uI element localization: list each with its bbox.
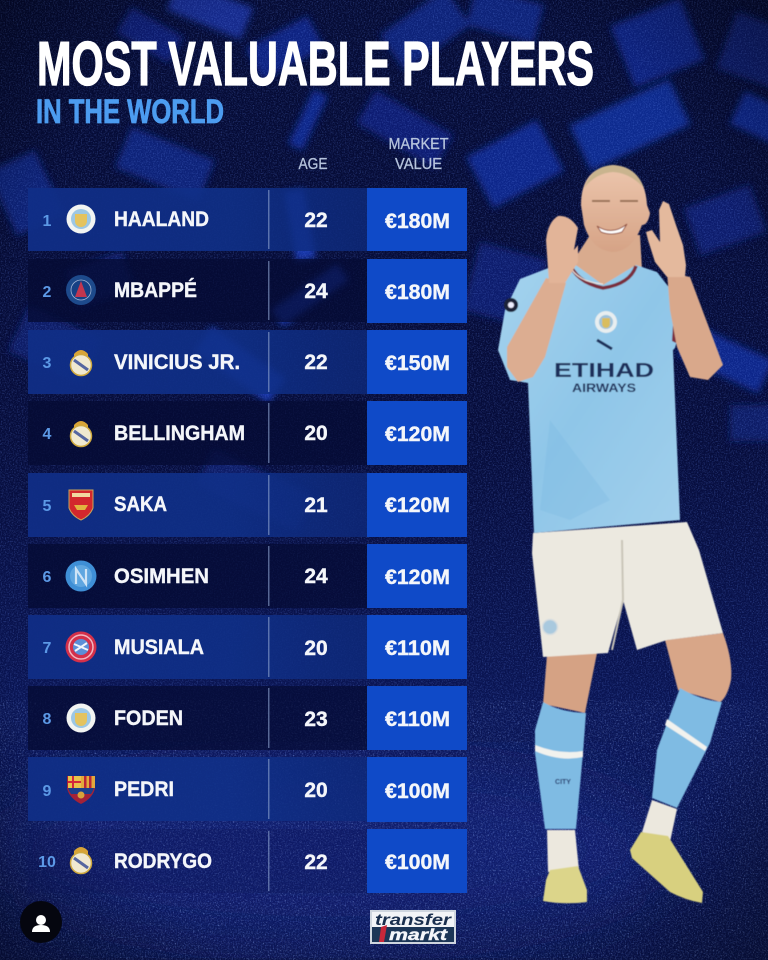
row 1: Haaland: €180M bbox=[385, 210, 450, 233]
club crest bbox=[595, 311, 617, 333]
column header: market value: MARKET bbox=[388, 136, 449, 153]
row 2: Mbappé: €180M bbox=[385, 281, 450, 304]
transfermarkt logo: markt bbox=[389, 927, 448, 944]
shorts bbox=[532, 522, 723, 657]
row 6: Osimhen: OSIMHEN bbox=[114, 565, 209, 588]
profile avatar bbox=[20, 901, 62, 943]
column header: age: AGE bbox=[298, 156, 328, 173]
left sock bbox=[535, 702, 586, 829]
row 4: Bellingham: BELLINGHAM bbox=[114, 422, 245, 445]
row 3: Vinicius Jr.: 3 bbox=[43, 355, 52, 372]
right sock bbox=[652, 688, 722, 808]
left leg and knee bbox=[543, 653, 597, 713]
row 9: Pedri: 9 bbox=[43, 783, 52, 800]
row 2: Mbappé: 2 bbox=[43, 284, 52, 301]
jersey bbox=[498, 260, 681, 533]
row 10: Rodrygo: RODRYGO bbox=[114, 850, 212, 873]
badge: Real Madrid bbox=[70, 421, 92, 446]
row 10: Rodrygo bbox=[28, 829, 467, 893]
row 8: Foden: 8 bbox=[43, 711, 52, 728]
row 5: Saka bbox=[28, 473, 467, 537]
transfermarkt logo bbox=[370, 910, 456, 944]
row 7: Musiala: €110M bbox=[385, 637, 450, 660]
left boot bbox=[543, 866, 587, 903]
right hand bbox=[646, 201, 686, 277]
badge: Real Madrid bbox=[70, 350, 92, 376]
row 3: Vinicius Jr. bbox=[28, 330, 467, 394]
neck bbox=[570, 235, 642, 292]
row 2: Mbappé: MBAPPÉ bbox=[114, 279, 197, 302]
lower glow behind table bbox=[0, 760, 670, 940]
row 5: Saka: 21 bbox=[304, 494, 328, 517]
subtitle: IN THE WORLD bbox=[36, 93, 224, 131]
row 5: Saka: €120M bbox=[385, 494, 450, 517]
column header: market value bbox=[388, 136, 449, 173]
transfermarkt logo: transfer bbox=[375, 912, 452, 929]
row 7: Musiala: 20 bbox=[304, 637, 328, 660]
row 10: Rodrygo: 10 bbox=[38, 854, 56, 871]
player illustration bbox=[498, 165, 731, 903]
row 5: Saka: SAKA bbox=[114, 493, 167, 516]
row 10: Rodrygo: €100M bbox=[385, 851, 450, 874]
row 10: Rodrygo: 22 bbox=[304, 851, 328, 874]
row 8: Foden bbox=[28, 686, 467, 750]
row 9: Pedri: €100M bbox=[385, 780, 450, 803]
row 1: Haaland: 22 bbox=[304, 209, 328, 232]
row 9: Pedri bbox=[28, 757, 467, 822]
right white sock foot bbox=[642, 800, 677, 842]
row 5: Saka: 5 bbox=[43, 498, 52, 515]
badge: PSG bbox=[66, 275, 96, 305]
row 6: Osimhen bbox=[28, 544, 467, 608]
row 2: Mbappé: 24 bbox=[304, 280, 328, 303]
head bbox=[581, 165, 650, 252]
row 6: Osimhen: 24 bbox=[304, 565, 328, 588]
row 1: Haaland bbox=[28, 188, 467, 251]
row 4: Bellingham bbox=[28, 401, 467, 465]
row 1: Haaland: 1 bbox=[43, 213, 52, 230]
row 9: Pedri: PEDRI bbox=[114, 778, 174, 801]
row 7: Musiala: 7 bbox=[43, 640, 52, 657]
row 4: Bellingham: €120M bbox=[385, 423, 450, 446]
row 7: Musiala: MUSIALA bbox=[114, 636, 204, 659]
badge: Manchester City bbox=[66, 204, 96, 234]
row 3: Vinicius Jr.: VINICIUS JR. bbox=[114, 351, 240, 374]
row 8: Foden: 23 bbox=[304, 708, 328, 731]
badge: Barcelona bbox=[67, 776, 95, 804]
row 2: Mbappé bbox=[28, 259, 467, 323]
left hand bbox=[546, 216, 578, 283]
falling money bills bbox=[0, 0, 768, 531]
left arm bbox=[507, 278, 566, 382]
row 3: Vinicius Jr.: €150M bbox=[385, 352, 450, 375]
right boot bbox=[630, 832, 703, 903]
left sock: CITY bbox=[555, 779, 571, 786]
row 1: Haaland: HAALAND bbox=[114, 208, 209, 231]
badge: Real Madrid bbox=[70, 847, 92, 874]
right arm bbox=[667, 272, 723, 380]
badge: Manchester City bbox=[66, 704, 96, 732]
jersey: AIRWAYS bbox=[572, 381, 636, 395]
badge: Bayern Munich bbox=[66, 632, 96, 662]
badge: Arsenal bbox=[69, 490, 93, 520]
row 4: Bellingham: 20 bbox=[304, 422, 328, 445]
row 7: Musiala bbox=[28, 615, 467, 679]
column header: market value: VALUE bbox=[395, 156, 442, 173]
left white sock foot bbox=[547, 830, 579, 872]
row 4: Bellingham: 4 bbox=[43, 426, 52, 443]
puma mark bbox=[597, 340, 612, 349]
row 6: Osimhen: €120M bbox=[385, 566, 450, 589]
row 3: Vinicius Jr.: 22 bbox=[304, 351, 328, 374]
row 8: Foden: FODEN bbox=[114, 707, 183, 730]
sponsor: ETIHAD bbox=[554, 360, 654, 382]
row 9: Pedri: 20 bbox=[304, 779, 328, 802]
champions league sleeve patch bbox=[504, 298, 518, 312]
row 6: Osimhen: 6 bbox=[43, 569, 52, 586]
badge: Napoli bbox=[66, 560, 96, 592]
right leg and knee bbox=[665, 633, 731, 702]
row 8: Foden: €110M bbox=[385, 708, 450, 731]
